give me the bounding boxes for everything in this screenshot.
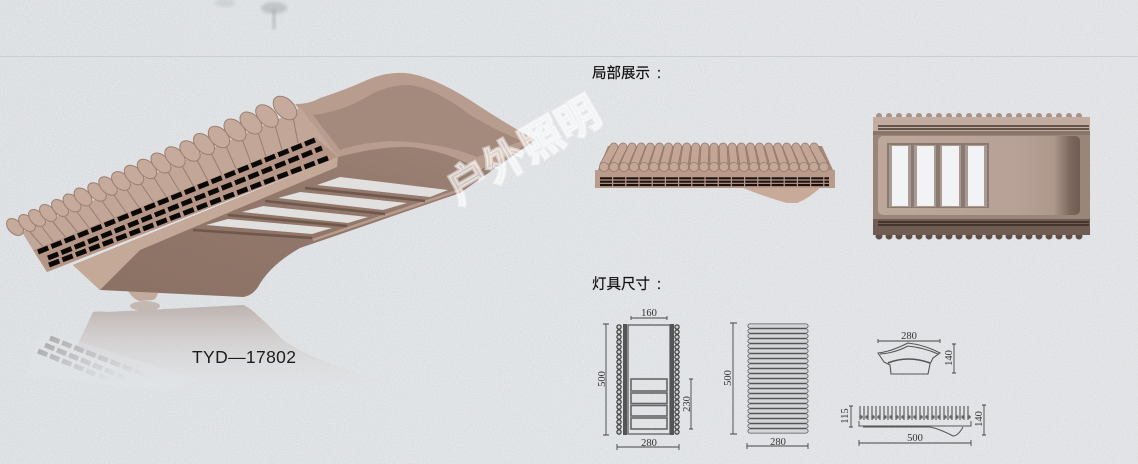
dimension drawing: top plan — [723, 323, 808, 449]
dimension values: 140 — [944, 350, 955, 366]
dimension lines — [849, 405, 986, 446]
light flange — [73, 157, 338, 290]
bottom scallops — [879, 232, 1087, 240]
fins — [860, 406, 968, 420]
front fins — [598, 146, 833, 170]
end face with vent slots — [33, 137, 338, 272]
dimension drawing: end elevation — [878, 331, 956, 374]
dimension values: 280 — [641, 438, 657, 449]
vent slots — [878, 126, 1089, 225]
dimension drawing: bottom plan — [597, 308, 693, 450]
dimension values: 280 — [901, 331, 917, 342]
fin dividers — [30, 117, 298, 248]
dimension values: 500 — [597, 371, 608, 387]
dimension values — [840, 408, 985, 444]
lamp top shell — [295, 73, 535, 193]
lens windows — [889, 145, 987, 207]
fin ovals — [3, 92, 301, 239]
front scallops — [604, 162, 827, 172]
end profile — [878, 343, 940, 374]
dimension values — [597, 308, 693, 449]
dimension values: 115 — [840, 408, 851, 424]
heading: partial display: 局部展示 : — [592, 65, 661, 82]
inner panel — [878, 136, 1080, 215]
fin bodies — [22, 107, 338, 272]
side stripes — [625, 324, 672, 435]
lens strips — [193, 177, 448, 238]
dimension values — [901, 331, 955, 366]
underside bump — [738, 186, 822, 203]
panel lower edge — [313, 190, 460, 240]
upper recess — [313, 85, 522, 157]
lens rectangles — [631, 379, 667, 429]
main street lamp — [3, 73, 535, 301]
plan body — [628, 325, 670, 434]
front slots — [600, 178, 829, 185]
lens frame — [887, 143, 989, 208]
dimension values: 160 — [641, 308, 657, 319]
heading: lamp dimensions: 灯具尺寸 : — [592, 276, 661, 293]
lamp reflection — [25, 301, 393, 392]
bottom band — [873, 219, 1090, 235]
top scallops — [879, 113, 1087, 119]
watermark: 户外照明 — [439, 88, 608, 213]
dimension values: 280 — [770, 437, 786, 448]
shadow band under top slots — [873, 131, 1090, 135]
body outline — [859, 421, 971, 436]
scallop band — [861, 415, 970, 419]
dimension values: 230 — [682, 396, 693, 412]
dimension values — [723, 370, 786, 448]
dimension lines — [730, 323, 808, 449]
top band — [873, 117, 1090, 132]
dimension lines — [878, 339, 956, 373]
product model label: TYD—17802 — [192, 347, 296, 367]
dimension values: 500 — [723, 370, 734, 386]
lamp underside — [73, 140, 535, 297]
dimension values: 500 — [907, 433, 923, 444]
dimension lines — [603, 316, 693, 450]
fin rows — [750, 326, 806, 431]
dimension drawing: side elevation — [840, 405, 986, 446]
front view of lamp — [595, 146, 835, 203]
dimension values: 140 — [974, 411, 985, 427]
outer housing — [873, 117, 1090, 235]
front face — [595, 170, 835, 188]
bottom view of lamp — [873, 116, 1090, 236]
lamp foot — [128, 291, 158, 301]
dotted fin columns — [619, 327, 677, 433]
